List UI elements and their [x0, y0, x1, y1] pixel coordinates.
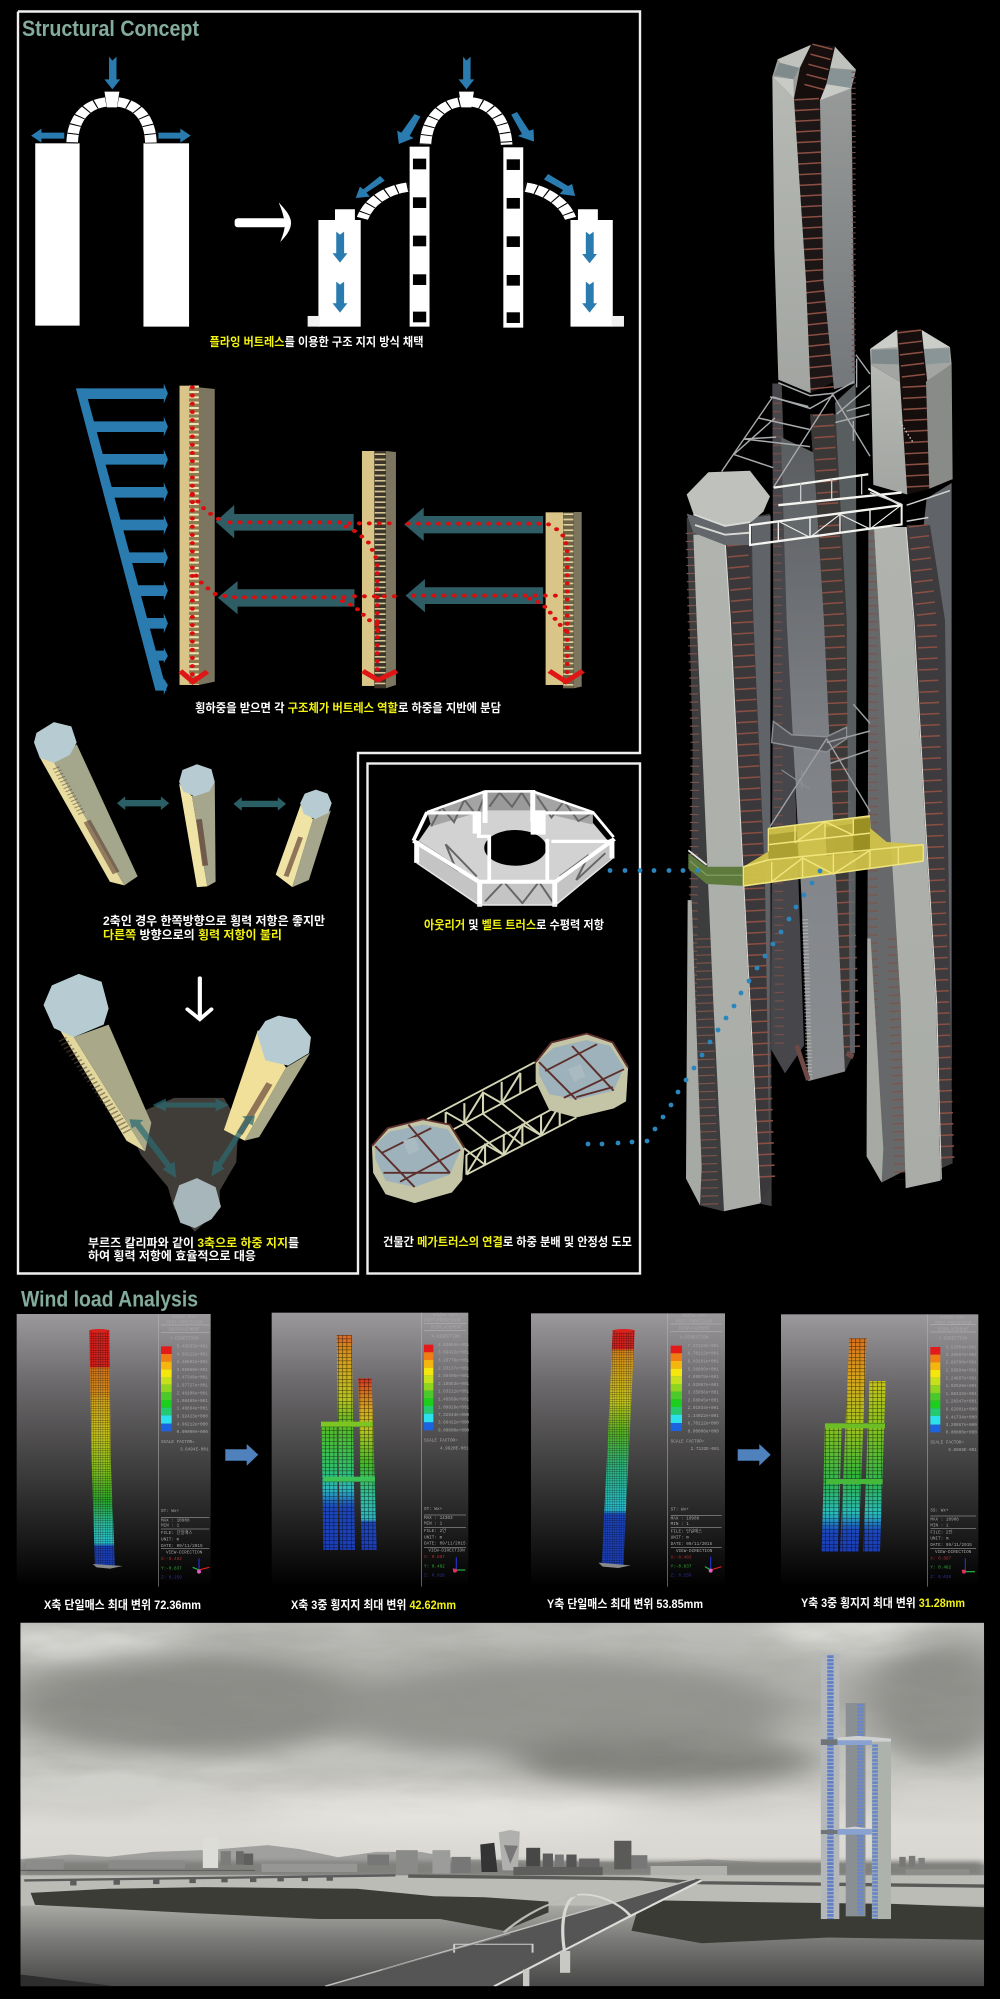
- island left: [31, 1887, 549, 1931]
- legend text: UNIT: m: [161, 1537, 180, 1542]
- legend text: 1.92520e+001: [946, 1384, 977, 1389]
- legend text: MAX : 10908: [161, 1518, 190, 1523]
- legend text: 6.03101e+001: [688, 1360, 719, 1365]
- legend text: VIEW-DIRECTION: [166, 1551, 203, 1556]
- colour legend: [161, 1346, 172, 1431]
- upper grey trusses: [722, 355, 870, 488]
- legend rules: [158, 1314, 209, 1587]
- mega truss upper octagon: [536, 1034, 628, 1117]
- legend text: 3.66422e+001: [438, 1351, 470, 1356]
- legend text: 2.24607e+001: [946, 1376, 977, 1381]
- mesh model: [321, 1335, 377, 1550]
- buttressed arch with piers: [308, 92, 624, 328]
- legend text: Y-DIRECTION: [170, 1336, 199, 1341]
- heading: Wind load Analysis: Wind load Analysis: [21, 1286, 198, 1312]
- mesh model: [89, 1329, 123, 1569]
- caption: three-axis: 하여 횡력 저항에 효율적으로 대응: [88, 1248, 256, 1263]
- legend text: Z: 0.259: [161, 1576, 182, 1581]
- legend text: 3.20867e+001: [946, 1353, 977, 1358]
- far bank: [408, 1876, 984, 1886]
- legend text: MAX : 10908: [930, 1518, 959, 1523]
- caption: X single mass: X축 단일매스 최대 변위 72.36mm: [44, 1597, 201, 1612]
- left tower: [686, 471, 772, 1211]
- legend text: MIN : 1: [424, 1522, 443, 1527]
- legend text: 9.62601e+000: [946, 1407, 977, 1412]
- legend text: 4.69078e+001: [688, 1375, 719, 1380]
- legend text: VIEW-DIRECTION: [935, 1550, 972, 1555]
- legend text: 2.48106e+001: [177, 1391, 208, 1396]
- panel: truss frame: [368, 764, 640, 1274]
- white transition arrow: [235, 202, 291, 242]
- legend text: 4.03064e+001: [438, 1343, 470, 1348]
- simple arch with two walls: [35, 92, 189, 327]
- study: three-axis towers: [44, 974, 311, 1232]
- axis icon: [453, 1557, 465, 1573]
- mega truss lower octagon: [372, 1119, 464, 1203]
- diagram: outrigger and belt truss: [372, 790, 628, 1203]
- red load path dots: [192, 387, 567, 675]
- legend text: X:-0.483: [161, 1557, 182, 1562]
- legend text: 3.52954e+001: [946, 1345, 977, 1350]
- legend text: 4.9620E-001: [440, 1446, 469, 1451]
- legend text: FILE: 단일매스: [161, 1529, 193, 1536]
- mesh model: [598, 1329, 635, 1568]
- outrigger floor: [417, 790, 613, 905]
- caption: Y single mass: Y축 단일매스 최대 변위 53.85mm: [547, 1596, 703, 1611]
- legend text: 0.00000e+000: [438, 1429, 470, 1434]
- 3D tower model: [686, 45, 953, 1211]
- legend text: 5.45833e+001: [177, 1345, 208, 1350]
- caption: outrigger: 아웃리거 및 벨트 트러스로 수평력 저항: [424, 917, 604, 932]
- legend text: 2.88780e+001: [946, 1361, 977, 1366]
- legend text: DATE: 09/11/2015: [161, 1544, 203, 1549]
- sky and clouds: [0, 1613, 1000, 1885]
- legend text: 3.96969e+001: [177, 1368, 208, 1373]
- legend text: 5.36090e+001: [688, 1367, 719, 1372]
- legend text: 2.56694e+001: [946, 1369, 977, 1374]
- study: two-axis towers: [34, 722, 332, 887]
- upper river: [20, 1875, 984, 1909]
- caption: three-axis: 부르즈 칼리파와 같이 3축으로 하중 지지를: [88, 1236, 299, 1250]
- legend text: DATE: 09/11/2015: [671, 1542, 713, 1547]
- legend rules: [422, 1313, 466, 1587]
- legend text: X-DIRECTION: [680, 1335, 709, 1340]
- legend text: X:-0.483: [671, 1555, 692, 1560]
- outrigger white bars: [413, 790, 614, 907]
- legend text: 6.41734e+000: [946, 1415, 977, 1420]
- legend text: MIN : 1: [161, 1524, 180, 1529]
- legend text: Y: 0.462: [930, 1566, 952, 1571]
- right tower upper: [870, 330, 953, 494]
- legend text: Y: 0.462: [424, 1564, 445, 1569]
- legend text: 1.28347e+001: [946, 1400, 977, 1405]
- island right: [631, 1901, 984, 1943]
- legend text: Z: 0.018: [424, 1574, 445, 1579]
- legend text: 1.46569e+001: [438, 1397, 470, 1402]
- caption: Y three-mass: Y축 3중 횡지지 최대 변위 31.28mm: [801, 1596, 965, 1610]
- legend text: DISPLACEMENT: [679, 1326, 711, 1331]
- legend text: 0.00000e+000: [688, 1429, 719, 1434]
- legend text: 2.97727e+001: [177, 1383, 208, 1388]
- legend text: 4.96212e+000: [177, 1422, 208, 1427]
- diagram: flying buttress arches: [31, 57, 624, 328]
- legend text: midas Gen: [941, 1316, 964, 1321]
- legend text: Y:-0.837: [671, 1565, 692, 1570]
- legend text: POST-PROCESSOR: [166, 1321, 203, 1326]
- legend text: 3.29779e+001: [438, 1359, 470, 1364]
- legend text: 7.32843e+000: [438, 1413, 470, 1418]
- teal force arrows: [216, 505, 543, 614]
- legend text: 5.6665E-001: [948, 1448, 977, 1453]
- mesh model: [822, 1338, 886, 1552]
- legend text: 2.68045e+001: [688, 1398, 719, 1403]
- legend text: SCALE FACTOR=: [671, 1439, 705, 1444]
- legend text: FILE: 단일매스: [671, 1527, 702, 1534]
- legend text: ST: Wx+: [161, 1509, 180, 1514]
- front water: [20, 1906, 984, 1986]
- foreground bridge: [325, 1879, 702, 1986]
- white down arrow: [187, 978, 211, 1019]
- diagram: lateral load path: [76, 383, 583, 695]
- legend text: POST-PROCESSOR: [935, 1321, 972, 1326]
- legend text: midas Gen: [683, 1314, 706, 1319]
- legend text: 2.56495e+001: [438, 1374, 470, 1379]
- legend text: UNIT: m: [930, 1537, 949, 1542]
- distant mountains: [20, 1845, 984, 1875]
- legend text: 2.7133E-001: [691, 1447, 720, 1452]
- callout dots: mega truss: [586, 869, 822, 1146]
- mega truss bridge: [427, 1062, 576, 1175]
- colour legend: [424, 1345, 433, 1430]
- rear bridge: [20, 1870, 395, 1885]
- tall back tower upper: [772, 45, 856, 393]
- tower 1: [180, 386, 215, 685]
- legend text: MAX : 10908: [671, 1516, 700, 1521]
- heading: Structural Concept: Structural Concept: [22, 16, 200, 41]
- legend text: Z: 0.259: [671, 1574, 692, 1579]
- arrow: X comparison: [225, 1444, 258, 1466]
- legend text: X: 0.887: [930, 1556, 952, 1561]
- city low-rise band: [20, 1861, 984, 1876]
- caption: flying buttress: 플라잉 버트레스를 이용한 구조 지지 방식 채택: [210, 334, 424, 349]
- caption: two-axis: 2축인 경우 한쪽방향으로 횡력 저항은 좋지만: [103, 913, 325, 928]
- legend rules: [928, 1314, 976, 1587]
- legend text: MIN : 1: [930, 1523, 949, 1528]
- legend text: DATE: 09/11/2015: [930, 1543, 972, 1548]
- legend text: Y:-0.837: [161, 1566, 182, 1571]
- legend text: SS: Wx+: [930, 1508, 949, 1513]
- legend text: 0.00000e+000: [177, 1430, 208, 1435]
- legend text: MIN : 1: [671, 1522, 689, 1527]
- legend text: 3.47348e+001: [177, 1376, 208, 1381]
- legend text: SCALE FACTOR=: [930, 1441, 964, 1446]
- legend text: MAX : 14303: [424, 1516, 453, 1521]
- legend text: X-DIRECTION: [431, 1334, 460, 1339]
- legend text: 1.83211e+001: [438, 1390, 470, 1395]
- chart: X three-mass: [272, 1313, 470, 1587]
- caption: two-axis: 다른쪽 방향으로의 횡력 저항이 불리: [103, 928, 282, 942]
- legend text: 1.98485e+001: [177, 1399, 208, 1404]
- right tower: [867, 483, 953, 1188]
- legend text: VIEW-DIRECTION: [428, 1549, 465, 1554]
- legend text: 3.6494E-001: [180, 1448, 209, 1453]
- legend text: 7.37123e+001: [688, 1344, 719, 1349]
- legend text: SCALE FACTOR=: [424, 1439, 458, 1444]
- core white panels: [473, 810, 546, 835]
- legend text: 1.60433e+001: [946, 1392, 977, 1397]
- caption: mega truss: 건물간 메가트러스의 연결로 하중 분배 및 안정성 도모: [383, 1234, 632, 1249]
- legend text: ST: Wx+: [424, 1507, 443, 1512]
- legend text: 2.01034e+001: [688, 1406, 719, 1411]
- legend text: 9.92423e+000: [177, 1415, 208, 1420]
- legend text: 4.96212e+001: [177, 1352, 208, 1357]
- legend text: FILE: 2안: [930, 1528, 953, 1535]
- legend text: 3.66422e+000: [438, 1421, 470, 1426]
- chart: X single mass: [17, 1314, 211, 1587]
- legend text: midas Gen: [433, 1313, 457, 1318]
- legend text: 3.35056e+001: [688, 1391, 719, 1396]
- legend text: DISPLACEMENT: [938, 1328, 969, 1333]
- legend text: 1.09926e+001: [438, 1405, 470, 1410]
- tall back tower lower: [771, 384, 857, 1081]
- chart: Y three-mass: [781, 1314, 978, 1587]
- axis icon: [962, 1558, 975, 1574]
- arrows on simple arch: [31, 57, 191, 143]
- tower 2: [362, 451, 396, 688]
- arrow: Y comparison: [738, 1444, 771, 1466]
- legend text: 6.70112e+000: [688, 1422, 719, 1427]
- wind load triangle: [76, 383, 168, 695]
- axis icon: [705, 1557, 721, 1573]
- legend text: 1.34022e+001: [688, 1414, 719, 1419]
- colour legend: [930, 1347, 940, 1432]
- corner road: [20, 1974, 115, 1986]
- white belt truss: [750, 474, 950, 545]
- legend text: DATE: 09/11/2015: [424, 1542, 466, 1547]
- legend text: 2.93137e+001: [438, 1366, 470, 1371]
- legend text: DISPLACEMENT: [169, 1328, 201, 1333]
- legend text: 1.48864e+001: [177, 1407, 208, 1412]
- callout dots: outrigger: [608, 868, 700, 873]
- green truss band: [688, 850, 743, 886]
- legend text: FILE: 2안: [424, 1527, 446, 1534]
- legend text: 3.20867e+000: [946, 1423, 977, 1428]
- legend text: 0.00000e+000: [946, 1431, 977, 1436]
- panel: structural concept frame: [18, 12, 640, 1274]
- arrows on buttressed arch: [333, 57, 597, 313]
- yellow mega truss band: [743, 816, 923, 886]
- legend text: DISPLACEMENT: [431, 1326, 462, 1331]
- legend rules: [667, 1313, 722, 1587]
- caption: X three-mass: X축 3중 횡지지 최대 변위 42.62mm: [291, 1598, 456, 1612]
- legend text: ST: Wx+: [671, 1507, 689, 1512]
- legend text: 6.70112e+001: [688, 1352, 719, 1357]
- legend text: VIEW-DIRECTION: [676, 1549, 713, 1554]
- three-axis force arrows: [129, 1099, 255, 1178]
- teal double arrows: [117, 796, 286, 811]
- caption: lateral load: 횡하중을 받으면 각 구조체가 버트레스 역할로 하중을 지반에 분담: [195, 700, 501, 715]
- legend text: 4.02067e+001: [688, 1383, 719, 1388]
- tower 3: [546, 512, 582, 688]
- diagram: tower arrangement studies: [34, 722, 332, 1232]
- legend text: POST-PROCESSOR: [424, 1319, 461, 1324]
- legend text: UNIT: m: [671, 1536, 689, 1541]
- legend text: POST-PROCESSOR: [676, 1319, 713, 1324]
- chart: Y single mass: [531, 1313, 725, 1587]
- colour legend: [671, 1346, 682, 1431]
- legend text: UNIT: m: [424, 1535, 443, 1540]
- legend text: 4.46591e+001: [177, 1360, 208, 1365]
- legend text: Y-DIRECTION: [939, 1337, 968, 1342]
- legend text: midas Gen: [172, 1315, 196, 1320]
- red chevrons: [180, 671, 583, 682]
- legend text: 2.19853e+001: [438, 1382, 470, 1387]
- legend text: X: 0.887: [424, 1555, 445, 1560]
- skyline: [26, 1830, 969, 1876]
- tower montage: [821, 1654, 891, 1919]
- legend text: SCALE FACTOR=: [161, 1440, 195, 1445]
- lower grey truss: [770, 704, 870, 827]
- axis icon: [193, 1558, 209, 1574]
- legend text: Z: 0.018: [930, 1575, 952, 1580]
- photo montage: Han River site: [0, 1613, 1000, 1986]
